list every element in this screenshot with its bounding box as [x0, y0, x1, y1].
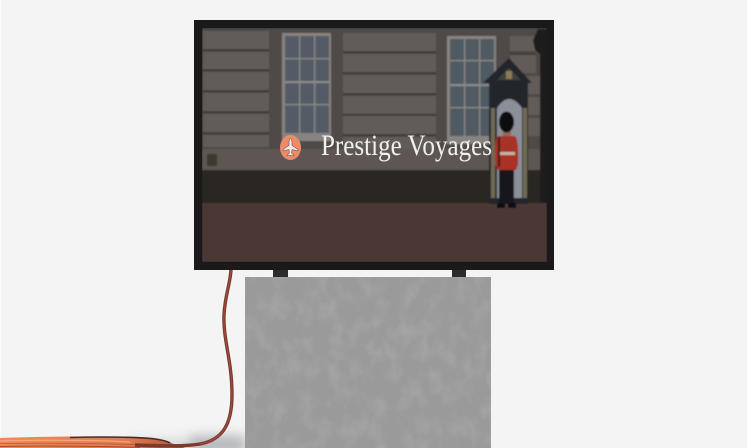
power cable [135, 270, 232, 446]
floor shadow [130, 436, 245, 448]
guard [495, 112, 518, 208]
lamp post [533, 29, 547, 203]
left edge strip [0, 0, 1, 448]
left window [282, 33, 331, 141]
concrete plinth [245, 277, 491, 448]
brand logo: plane badge [280, 135, 301, 160]
sentry box [483, 58, 532, 204]
photo: palace guard scene [202, 28, 547, 262]
sign frame [194, 20, 554, 270]
stone courses [203, 31, 540, 149]
stone shadow lines [203, 50, 536, 136]
mounting feet [273, 269, 466, 277]
ground [202, 203, 547, 262]
palace wall [202, 28, 547, 170]
dark base band [202, 170, 547, 203]
brand name: Prestige Voyages [321, 129, 492, 162]
orange cable coil on floor [0, 436, 185, 448]
stone plinth band [202, 149, 547, 170]
right window [447, 36, 496, 144]
icon: plane [283, 138, 298, 156]
